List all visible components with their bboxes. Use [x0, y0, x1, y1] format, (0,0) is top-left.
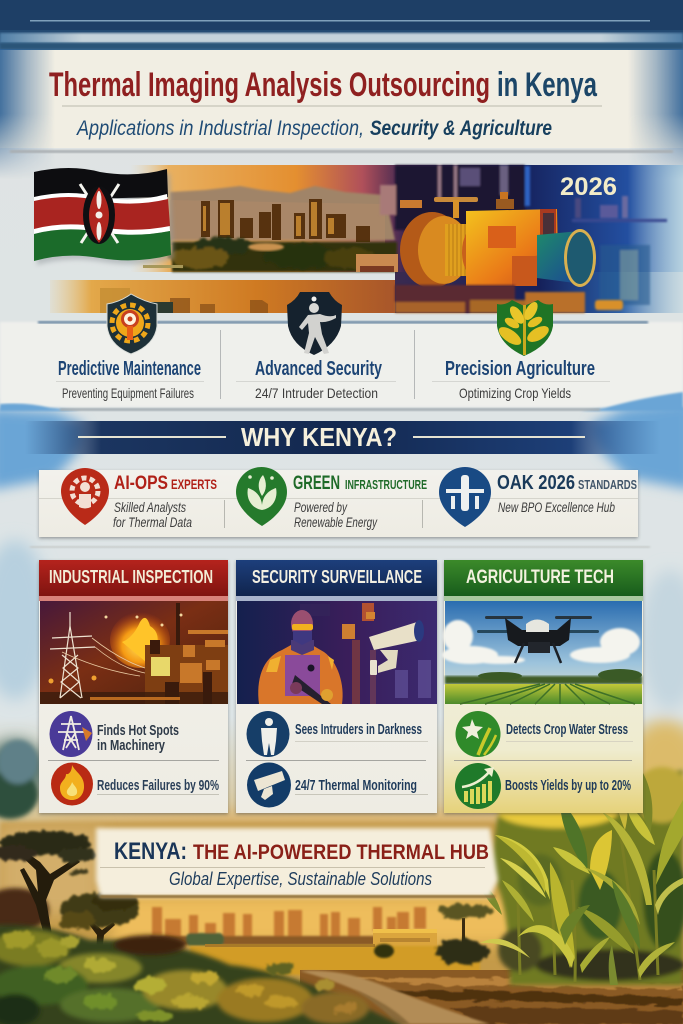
item: hot spots: Finds Hot Spots — [97, 722, 179, 739]
illustration: pylon and fire — [40, 601, 228, 704]
reason: AI-Ops experts: for Thermal Data — [113, 514, 192, 530]
subtitle — [75, 117, 552, 140]
closing headline: THE AI-POWERED THERMAL HUB — [193, 841, 489, 864]
icon: plant shield — [496, 300, 553, 356]
item: hot spots: in Machinery — [97, 737, 165, 754]
reason: OAK 2026 standards: STANDARDS — [578, 477, 637, 492]
item: intruders — [246, 711, 428, 757]
icon: flame — [51, 762, 93, 806]
city skyline — [150, 907, 426, 946]
label: advanced security: 24/7 Intruder Detection — [255, 385, 378, 401]
label: advanced security — [255, 358, 383, 401]
sky wash beside why-Kenya banner — [0, 400, 683, 490]
item: reduces failures — [51, 762, 219, 806]
closing headline: KENYA: — [114, 838, 187, 865]
reason: OAK 2026 standards — [439, 467, 637, 527]
panel: closing banner — [96, 828, 498, 898]
item: water stress — [456, 711, 633, 757]
main title: in Kenya — [497, 66, 598, 104]
card header: AGRICULTURE TECH — [466, 567, 614, 588]
label: precision agriculture: Optimizing Crop Yields — [459, 385, 571, 401]
year label: 2026 — [560, 173, 617, 201]
label: precision agriculture: Precision Agriculture — [445, 358, 595, 380]
subtitle: Security & Agriculture — [370, 117, 552, 140]
card header: SECURITY SURVEILLANCE — [252, 567, 422, 587]
hero image panel — [50, 165, 683, 313]
label: predictive maintenance: Preventing Equipment Failures — [62, 385, 194, 401]
label: predictive maintenance: Predictive Maintenance — [58, 358, 201, 380]
icon: crop and star — [456, 711, 500, 757]
closing tagline: Global Expertise, Sustainable Solutions — [169, 869, 432, 889]
icon: growth chart — [455, 763, 501, 809]
reason: green infrastructure: Renewable Energy — [294, 514, 378, 530]
small tree — [59, 889, 140, 960]
left bushes and trees — [0, 831, 493, 1024]
field — [190, 946, 480, 975]
panel: industrial inspection card — [39, 560, 228, 813]
card header — [236, 560, 437, 601]
reason: AI-Ops experts: AI-OPS — [114, 473, 168, 494]
item: intruders: Sees Intruders in Darkness — [295, 721, 422, 738]
reason: OAK 2026 standards: OAK 2026 — [497, 472, 575, 494]
heading: why Kenya banner — [25, 421, 660, 454]
item: hot spots — [50, 711, 179, 757]
factory building — [373, 929, 437, 957]
heading: why Kenya banner: WHY KENYA? — [241, 422, 397, 452]
reason: AI-Ops experts: Skilled Analysts — [114, 499, 186, 515]
card header — [39, 560, 228, 601]
acacia tree — [0, 831, 96, 935]
title panel — [0, 49, 683, 179]
item: yields — [455, 763, 631, 809]
illustration: thermal figure and camera — [237, 601, 437, 704]
reason: OAK 2026 standards: New BPO Excellence Hub — [498, 499, 615, 515]
foliage — [0, 925, 410, 1024]
label: advanced security: Advanced Security — [255, 358, 383, 380]
item: reduces failures: Reduces Failures by 90% — [97, 777, 219, 794]
icon: camera — [247, 762, 291, 808]
reason: green infrastructure — [236, 467, 427, 530]
panel: security surveillance card — [236, 560, 437, 813]
shaded undergrowth left — [0, 888, 49, 932]
closing headline — [114, 838, 489, 865]
dirt ground — [300, 970, 683, 1024]
distant tree clump left — [0, 740, 38, 819]
icon: blue pin — [439, 467, 491, 527]
icon: red pin — [61, 468, 109, 525]
reason: green infrastructure: INFRASTRUCTURE — [345, 477, 427, 492]
skyline scene — [143, 186, 398, 272]
corn field — [476, 767, 683, 985]
item: monitoring: 24/7 Thermal Monitoring — [295, 777, 417, 794]
reason: AI-Ops experts — [61, 468, 217, 530]
icon: Kenya flag — [34, 168, 174, 265]
strip city silhouette — [100, 288, 268, 313]
machine scene — [380, 165, 667, 313]
subtitle: Applications in Industrial Inspection, — [75, 117, 364, 140]
card header: INDUSTRIAL INSPECTION — [49, 567, 213, 587]
label: precision agriculture — [445, 358, 595, 401]
reason: green infrastructure: Powered by — [294, 499, 348, 515]
icon: security shield — [287, 292, 342, 355]
icon: gear shield — [107, 294, 157, 354]
bottom landscape — [0, 560, 683, 1024]
reason: AI-Ops experts: EXPERTS — [171, 476, 217, 492]
sky glow — [0, 825, 530, 945]
illustration: drone over field — [442, 601, 642, 704]
main title: Thermal Imaging Analysis Outsourcing — [49, 66, 490, 104]
reason: green infrastructure: GREEN — [293, 473, 340, 494]
panel: three focus areas — [0, 292, 683, 411]
icon: person — [246, 711, 290, 757]
distant trees right — [436, 904, 493, 965]
icon: tower — [50, 711, 92, 757]
item: monitoring — [247, 762, 428, 808]
icon: green pin — [236, 467, 287, 526]
panel: why Kenya reasons — [30, 467, 650, 548]
label: predictive maintenance — [58, 358, 201, 401]
card header — [444, 560, 643, 601]
panel: agriculture tech card — [442, 560, 643, 813]
